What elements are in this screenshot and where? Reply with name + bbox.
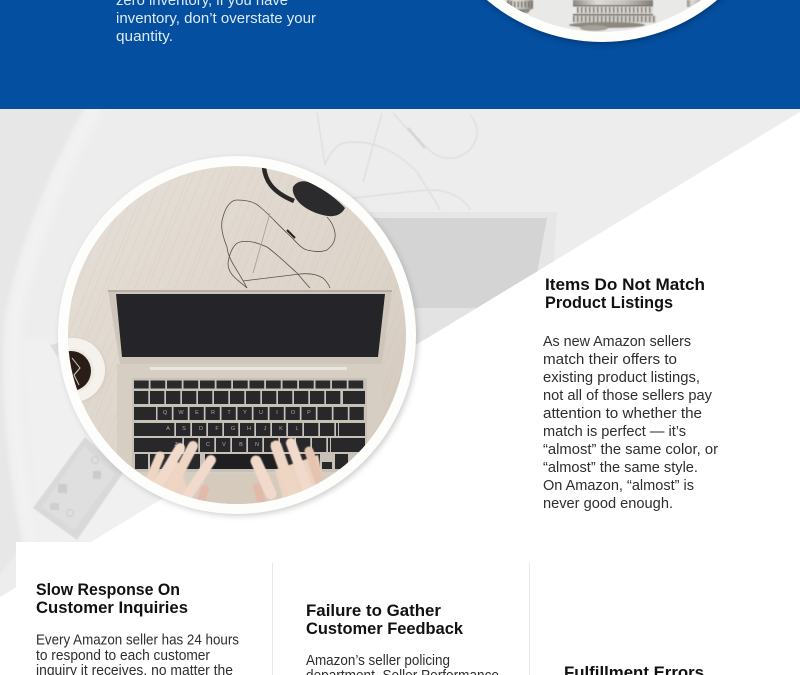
section: items do not match product listings (543, 276, 718, 512)
banner text: inventory tip (116, 0, 316, 45)
trackpad (206, 498, 281, 504)
heading: items do not match: Product Listings (545, 294, 673, 312)
laptop base (117, 364, 385, 510)
body text: items do not match: match their offers to (543, 352, 677, 368)
body text: items do not match: never good enough. (543, 496, 673, 512)
key letters: ZXCVBNM (174, 442, 276, 448)
column: failure to gather feedback: Amazon’s seller policing (306, 653, 450, 669)
body text: items do not match (543, 334, 718, 512)
body text: items do not match: On Amazon, “almost” is (543, 478, 694, 494)
photo: laptop on desk in circle (41, 156, 418, 516)
laptop lid (108, 290, 392, 364)
heading: items do not match: Items Do Not Match (545, 276, 705, 294)
background: faded desk photo (0, 105, 800, 600)
body text: items do not match: attention to whether the (543, 406, 702, 422)
key letters: QWERTYUIOP (163, 410, 311, 416)
body text: items do not match: not all of those sellers pay (543, 388, 713, 404)
body text: items do not match: “almost” the same style. (543, 460, 698, 476)
column: slow response: Every Amazon seller has 24 hours (36, 632, 239, 648)
body text: items do not match: As new Amazon sellers (543, 334, 691, 350)
banner text: inventory tip: inventory, don’t overstate your (116, 11, 316, 27)
column: slow response: to respond to each customer (36, 648, 210, 664)
body text: items do not match: match is perfect — it’s (543, 424, 686, 440)
headphones (264, 167, 345, 216)
blue banner (0, 0, 800, 109)
heading: items do not match (545, 276, 705, 312)
column: slow response: Slow Response On (36, 581, 180, 599)
wood grain (60, 160, 410, 510)
banner text: inventory tip: quantity. (116, 29, 173, 45)
key letters (163, 410, 311, 448)
ghost arc at left (0, 105, 87, 600)
photo: coin stacks in circle (482, 0, 724, 46)
coffee cup (68, 338, 106, 403)
hands (149, 443, 325, 505)
ghost earphone wires (317, 112, 477, 210)
column: failure to gather feedback: Customer Feedback (306, 620, 464, 638)
body text: items do not match: existing product listings, (543, 370, 700, 386)
column: failure to gather feedback: Failure to Gather (306, 602, 442, 620)
body text: items do not match: “almost” the same color, or (543, 442, 718, 458)
ghost laptop (420, 262, 553, 342)
column: failure to gather feedback (306, 602, 499, 675)
key letters: ASDFGHJKL (166, 426, 299, 432)
white card: three columns (16, 542, 800, 675)
column: slow response (36, 581, 239, 675)
earphone wires (222, 200, 335, 288)
keyboard (134, 384, 365, 469)
ghost phone (33, 437, 123, 540)
column: slow response: Customer Inquiries (36, 599, 188, 617)
